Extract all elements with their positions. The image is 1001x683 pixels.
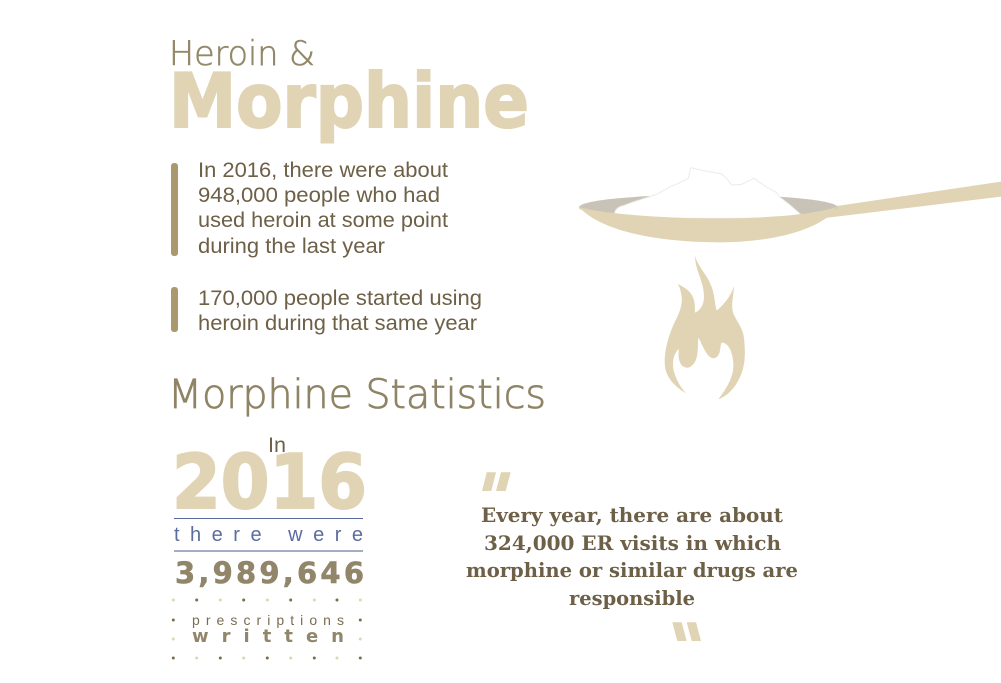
accent bar xyxy=(171,163,178,256)
accent bar xyxy=(171,287,178,332)
label: prescriptions: prescriptions xyxy=(192,612,344,628)
quote text: 324,000 ER visits in which xyxy=(484,531,781,555)
text block: heroin last year xyxy=(171,159,448,258)
title line: Morphine: Morphine xyxy=(169,57,529,145)
text block: heroin new users xyxy=(171,287,482,335)
rule top xyxy=(174,518,363,519)
big year: 2016 xyxy=(172,438,367,526)
big number: 3,989,646 xyxy=(175,556,364,590)
paragraph: 170,000 people started using xyxy=(198,287,482,310)
stat panel: prescriptions xyxy=(172,434,367,660)
illustration: spoon with powder xyxy=(579,168,1001,242)
icon: opening quote mark xyxy=(482,472,511,491)
title line: Heroin &: Heroin & xyxy=(169,34,315,74)
paragraph xyxy=(198,287,482,335)
dot border xyxy=(172,598,362,660)
quote text: Every year, there are about xyxy=(481,503,784,527)
paragraph: In 2016, there were about xyxy=(198,159,448,182)
callout: ER visits quote xyxy=(466,472,798,641)
quote text: responsible xyxy=(569,586,695,610)
label: In: In xyxy=(268,434,286,457)
powder pile xyxy=(614,168,801,218)
paragraph: heroin during that same year xyxy=(198,312,477,335)
heading: Morphine Statistics: Morphine Statistics xyxy=(168,372,546,418)
paragraph: used heroin at some point xyxy=(198,209,448,232)
paragraph: during the last year xyxy=(198,235,385,258)
spoon bowl front xyxy=(579,207,837,242)
title xyxy=(169,34,529,145)
icon: flame xyxy=(665,256,745,399)
label: written: written xyxy=(192,626,344,647)
spoon bowl interior xyxy=(579,195,838,220)
spoon handle xyxy=(825,182,1001,218)
quote text: morphine or similar drugs are xyxy=(466,558,798,582)
icon: closing quote mark xyxy=(672,622,701,641)
paragraph xyxy=(198,159,448,258)
rule bottom xyxy=(174,550,363,552)
label: there were: there were xyxy=(174,524,363,546)
quote text xyxy=(466,503,798,610)
paragraph: 948,000 people who had xyxy=(198,184,440,207)
